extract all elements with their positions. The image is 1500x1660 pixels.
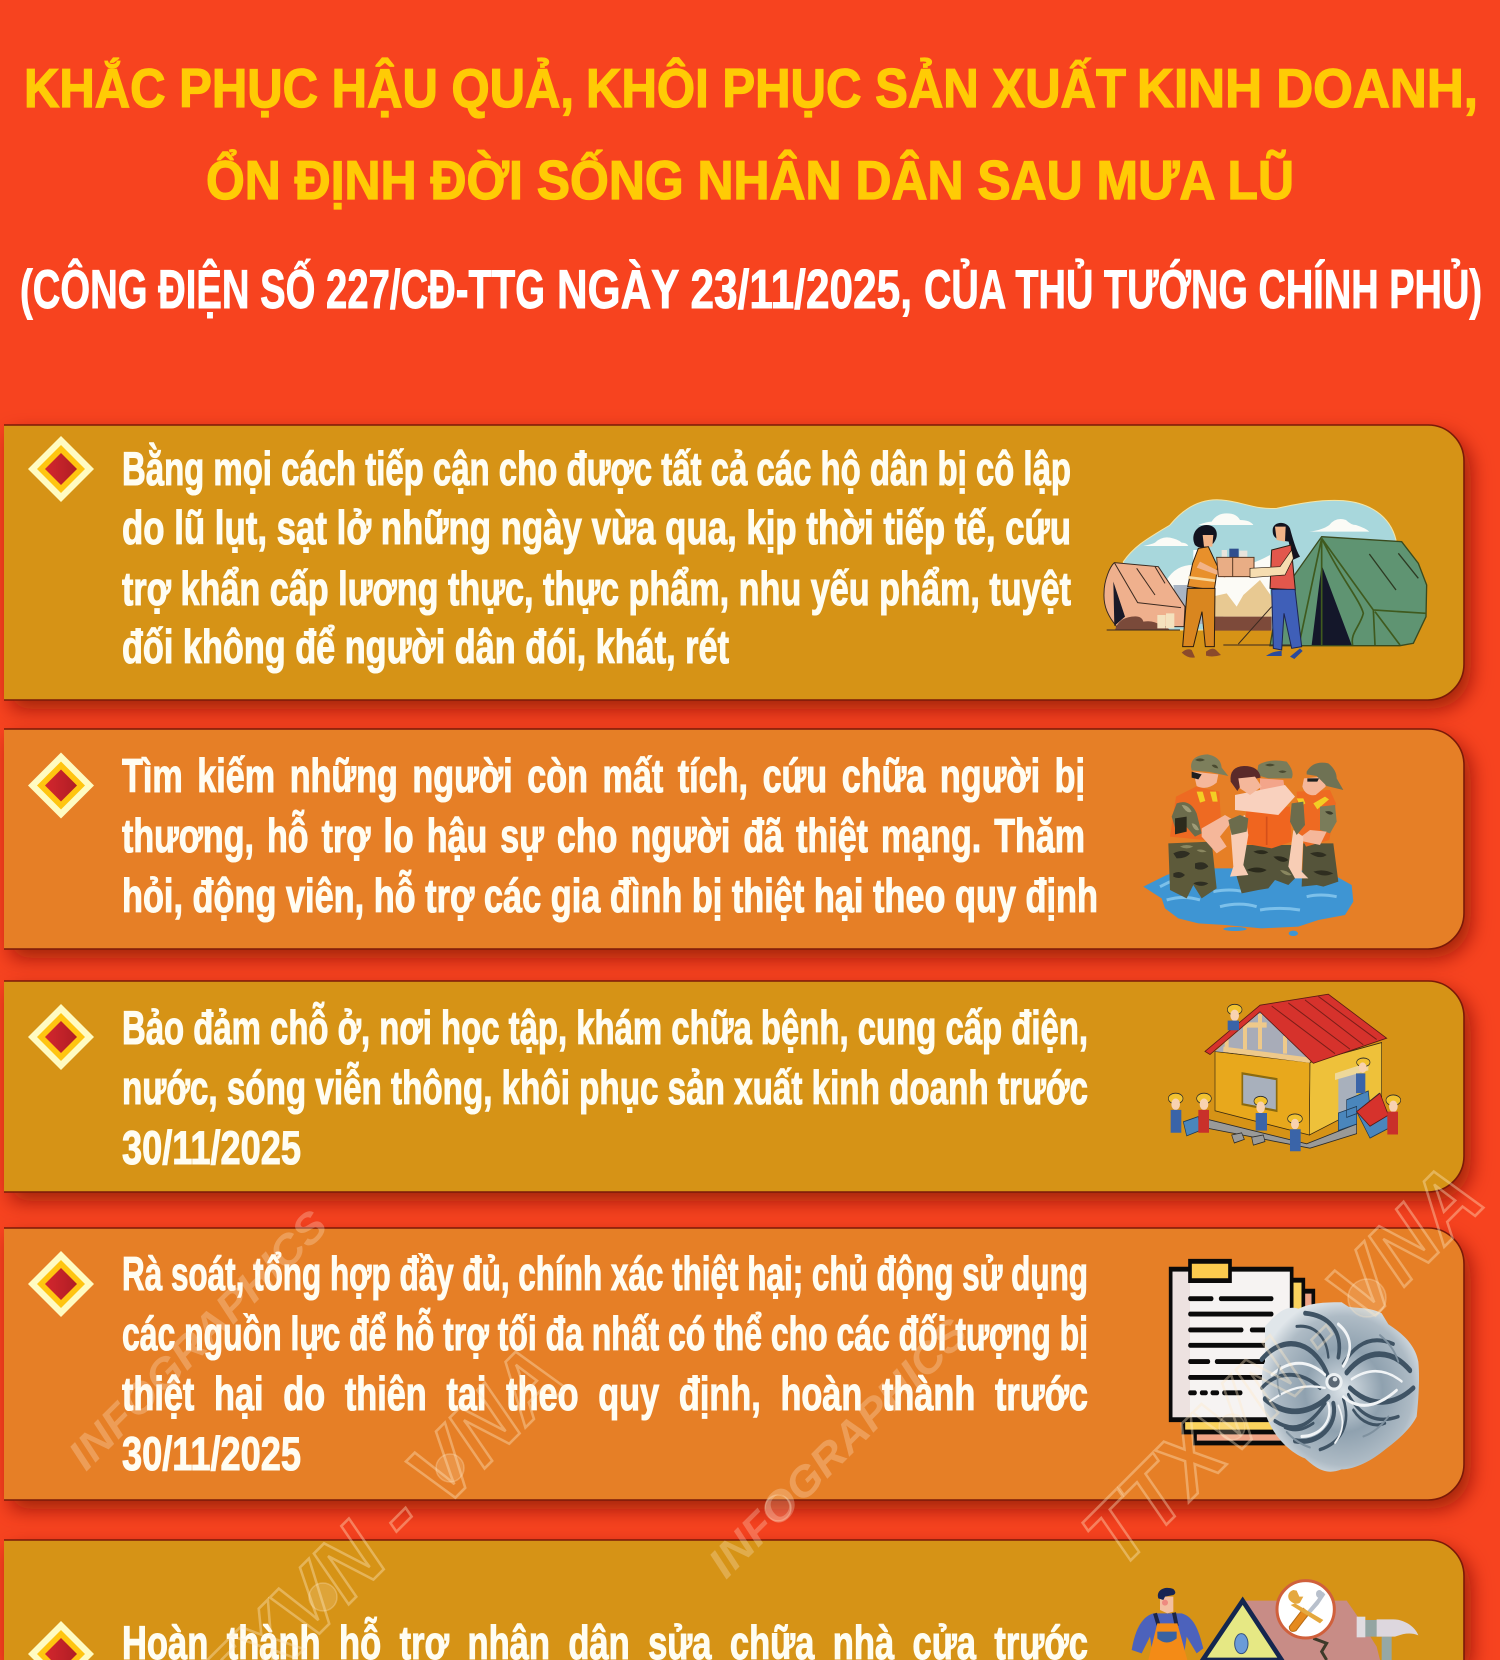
icon: soldiers rescuing a child in floodwater: [1143, 754, 1353, 936]
text: panel 4: 30/11/2025: [122, 1427, 301, 1480]
panel 1: reach isolated households: [4, 425, 1464, 700]
text: panel 3: Bảo đảm chỗ ở, nơi học tập, khám chữa bệnh, cung cấp điện,: [122, 1001, 1088, 1054]
repairman: [1132, 1613, 1203, 1660]
icon: diamond bullet 1: [28, 436, 94, 502]
watermark: INFOGRAPHICS centre: INFOGRAPHICS: [699, 1309, 976, 1586]
text: panel 3: [122, 1001, 1088, 1174]
subtitle: (CÔNG ĐIỆN SỐ 227/CĐ-TTG: [20, 258, 545, 320]
icon: workers building a house: [1168, 994, 1401, 1151]
icon: clipboard and typhoon: [1171, 1261, 1419, 1472]
text: panel 2: Tìm kiếm những người còn mất tích, cứu chữa người bị: [122, 749, 1085, 802]
text: panel 1: Bằng mọi cách tiếp cận cho được tất cả các hộ dân bị cô lập: [122, 442, 1071, 495]
relief box: [1222, 550, 1247, 558]
text: panel 1: trợ khẩn cấp lương thực, thực phẩm, nhu yếu phẩm, tuyệt: [122, 562, 1071, 615]
watermark: globes: [309, 1279, 1386, 1611]
icon: diamond bullet 4: [28, 1251, 94, 1317]
panel 2: search and rescue: [4, 729, 1464, 949]
workers: [1168, 1004, 1401, 1124]
icon: diamond bullet 2: [28, 752, 94, 818]
watermark: INFOGRAPHICS left: INFOGRAPHICS: [59, 1201, 336, 1478]
text: panel 1: do lũ lụt, sạt lở những ngày vừa qua, kịp thời tiếp tế, cứu: [122, 501, 1071, 554]
left soldier: [1168, 842, 1217, 898]
text: panel 4: [122, 1247, 1088, 1480]
icon: repairman, damaged house and tools: [1132, 1581, 1418, 1660]
panel 3: housing and services: [4, 981, 1464, 1192]
title: KHÔI PHỤC SẢN XUẤT: [586, 57, 1126, 119]
centre soldier and child: [1237, 845, 1298, 893]
title: [24, 57, 1478, 211]
text: panel 1: đối không để người dân đói, khát, rét: [122, 620, 729, 673]
text: panel 2: thương, hỗ trợ lo hậu sự cho người đã thiệt mạng. Thăm: [122, 809, 1085, 862]
title: KHẮC PHỤC HẬU QUẢ,: [24, 57, 574, 119]
text: panel 3: 30/11/2025: [122, 1121, 301, 1174]
text: panel 4: thiệt hại do thiên tai theo quy định, hoàn thành trước: [122, 1367, 1088, 1420]
left volunteer: [1193, 525, 1217, 548]
title: KINH DOANH,: [1137, 57, 1478, 119]
text: panel 3: nước, sóng viễn thông, khôi phục sản xuất kinh doanh trước: [122, 1061, 1088, 1114]
right volunteer: [1273, 523, 1300, 560]
text: panel 2: [122, 749, 1098, 922]
icon: diamond bullet 5: [28, 1621, 94, 1660]
title: ỔN ĐỊNH ĐỜI SỐNG NHÂN DÂN SAU MƯA LŨ: [206, 149, 1294, 211]
subtitle: [20, 258, 1482, 320]
icon: diamond bullet 3: [28, 1004, 94, 1070]
right soldier: [1302, 843, 1338, 887]
panel 4: damage review: [4, 1228, 1464, 1500]
text: panel 1: [122, 442, 1071, 673]
icon: relief tents and volunteers: [1104, 500, 1427, 659]
panel 5: repair homes: [4, 1540, 1464, 1660]
text: panel 2: hỏi, động viên, hỗ trợ các gia đình bị thiệt hại theo quy định: [122, 869, 1098, 922]
subtitle: NGÀY 23/11/2025,: [557, 258, 912, 320]
